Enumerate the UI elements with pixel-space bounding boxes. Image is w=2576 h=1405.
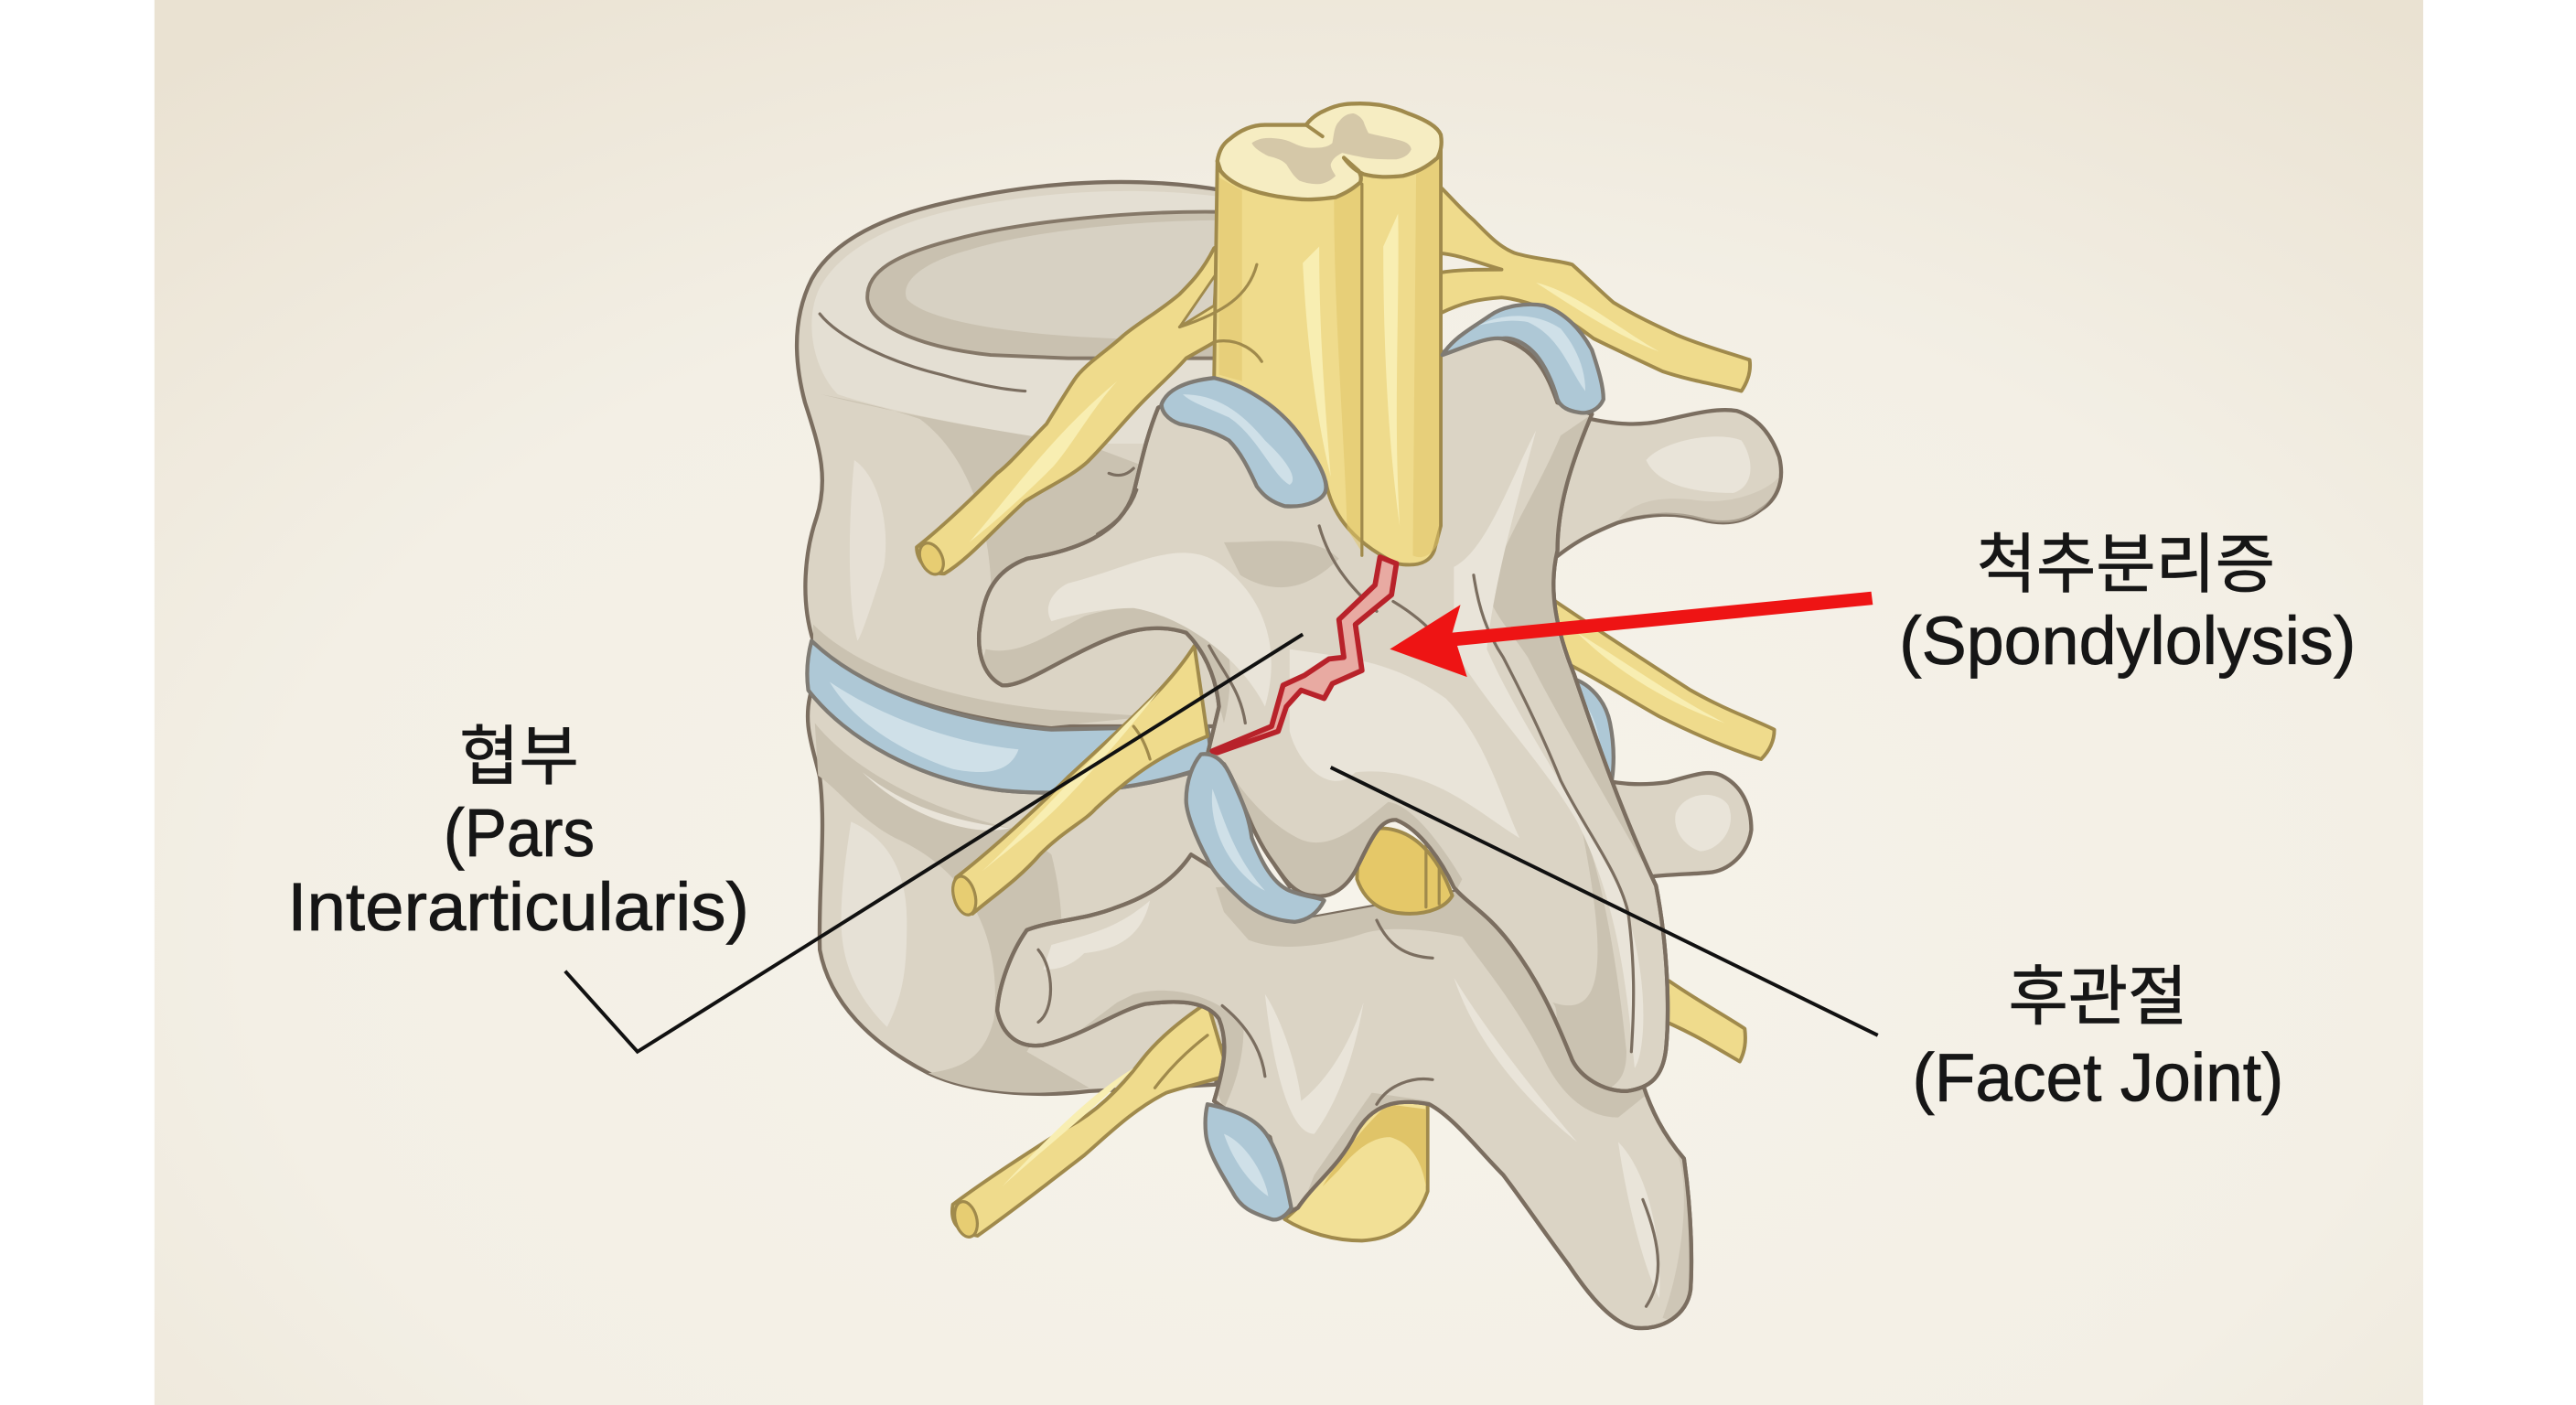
vertebral body: upper — [797, 182, 1249, 726]
nerve: right upper root — [1439, 188, 1750, 391]
label: pars interarticularis: 협부 — [459, 705, 579, 799]
right transverse process: upper — [1544, 410, 1781, 567]
label: spondylolysis: 척추분리증 — [1977, 512, 2275, 606]
spinal cord: cut top face — [1218, 103, 1442, 199]
leader line: pars interarticularis — [565, 634, 1303, 1052]
facet: middle left cartilage — [1186, 754, 1325, 922]
nerve: left middle root — [949, 646, 1208, 917]
vertebra: lower left cartilage — [1206, 1104, 1292, 1219]
arrow: red pointer to crack — [1390, 592, 1873, 677]
label: facet joint: (Facet Joint) — [1912, 1040, 2283, 1116]
nerve: lower left root — [951, 1003, 1229, 1239]
facet: upper right cartilage — [1443, 305, 1604, 413]
vertebra: lower posterior element — [997, 854, 1701, 1339]
bone shading — [978, 411, 1643, 1093]
label: pars interarticularis: Interarticularis) — [287, 869, 749, 945]
label: facet joint — [1912, 945, 2283, 1116]
facet: upper left cartilage — [1162, 378, 1326, 507]
bone outline — [979, 338, 1668, 1091]
vertebral body: lower — [808, 691, 1249, 1094]
intervertebral disc — [807, 641, 1212, 792]
vertebra: upper posterior element — [978, 338, 1668, 1093]
spinal cord: lower visible section — [1284, 1101, 1428, 1240]
nerve: left upper root — [915, 204, 1236, 578]
label: pars interarticularis: (Pars — [444, 795, 595, 871]
label: spondylolysis — [1899, 512, 2356, 679]
label: spondylolysis: (Spondylolysis) — [1899, 603, 2356, 679]
label: pars interarticularis — [287, 705, 749, 945]
fracture crack — [1212, 557, 1397, 753]
leader line: facet joint — [1331, 767, 1878, 1035]
nerve: right middle root — [1536, 588, 1775, 759]
upper endplate surface — [867, 212, 1224, 359]
right transverse process: middle — [1585, 773, 1751, 877]
label: facet joint: 후관절 — [2009, 945, 2187, 1038]
spinal cord: middle visible section — [1357, 828, 1453, 914]
spinal cord: main column — [1179, 103, 1442, 564]
nerve: right lower root — [1643, 973, 1745, 1062]
bone contour lines — [1098, 468, 1634, 1052]
facet: right middle cartilage — [1551, 677, 1614, 805]
illustration: lumbar spine segment — [797, 103, 1873, 1339]
